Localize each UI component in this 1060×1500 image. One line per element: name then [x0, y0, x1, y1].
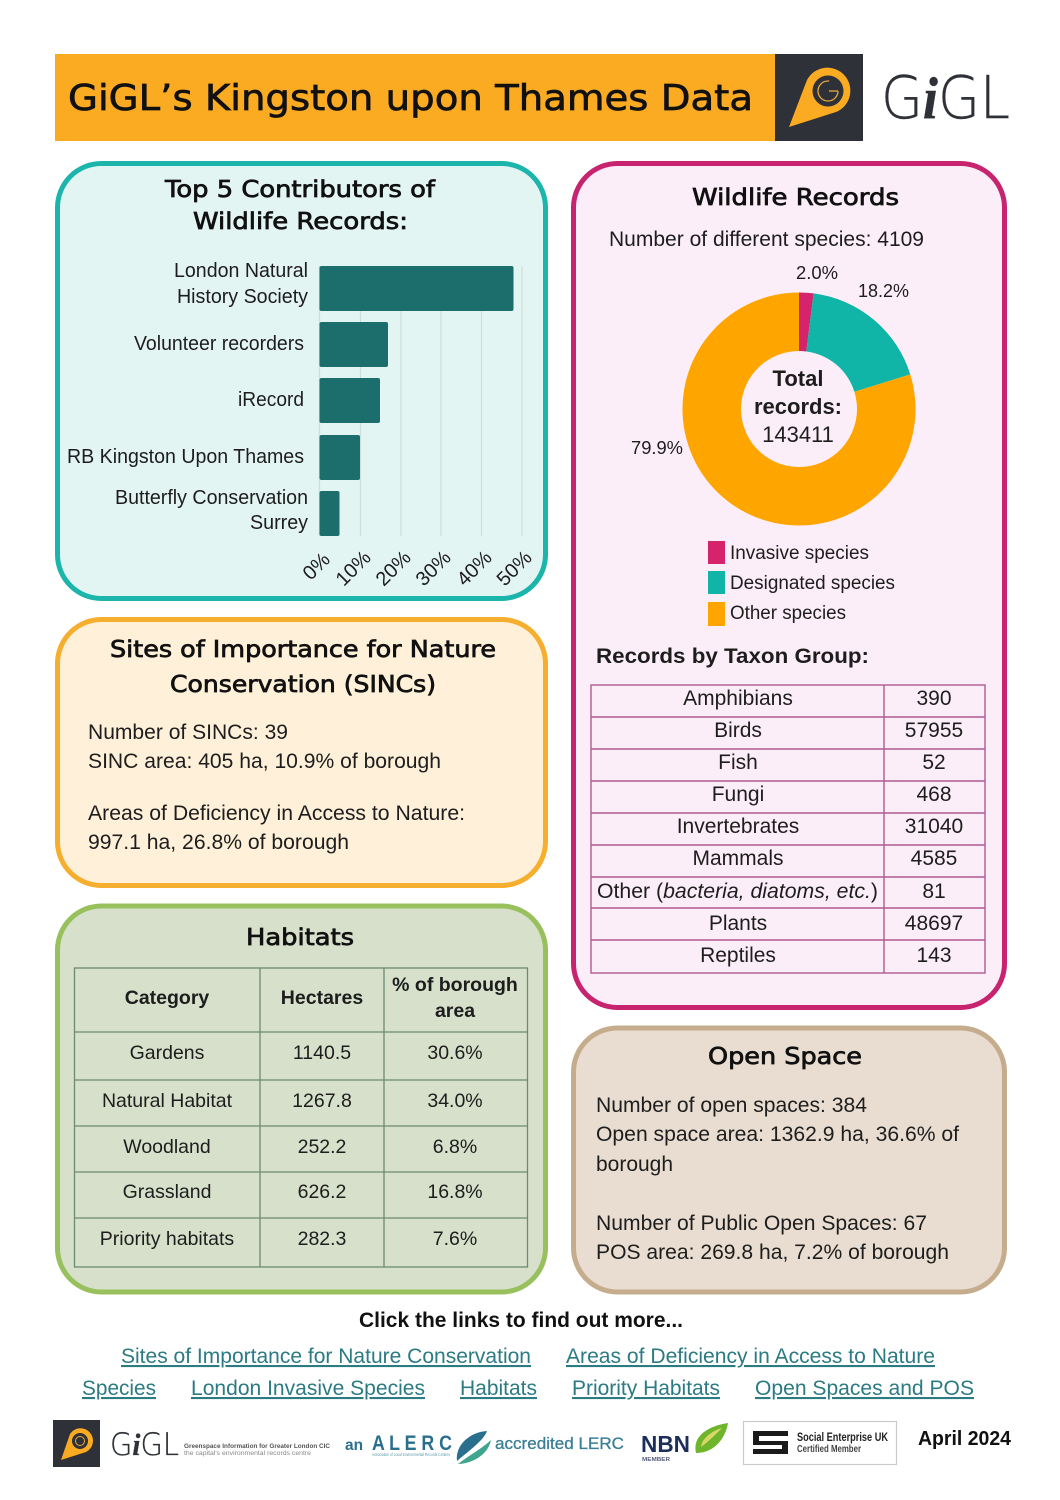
donut chart: records by species type: Total	[773, 366, 823, 391]
table: habitats: 30.6%	[427, 1042, 483, 1064]
table: habitats: Natural Habitat	[102, 1090, 233, 1112]
table: habitats: 34.0%	[427, 1090, 483, 1112]
table: habitats: Woodland	[123, 1136, 211, 1158]
heading: habitats: Habitats	[246, 925, 354, 951]
table: taxon groups: Fish	[718, 751, 758, 774]
text: open space figures: Open space area: 1362.9 ha, 36.6% of	[596, 1123, 959, 1146]
links: Sites of Importance for Nature Conservation	[121, 1345, 531, 1368]
footer logo: Social Enterprise UK: Certified Member	[797, 1444, 861, 1455]
heading: top 5 contributors: Top 5 Contributors of	[164, 177, 436, 203]
links: Open Spaces and POS	[755, 1377, 974, 1400]
table: habitats: 16.8%	[427, 1181, 483, 1203]
footer logo: ALERC accredited LERC: an	[345, 1437, 363, 1454]
table: taxon groups: 48697	[905, 912, 963, 935]
bar chart: contributors: 50%	[493, 547, 537, 591]
table: habitats: Grassland	[123, 1181, 211, 1203]
text: public open space figures: Number of Public Open Spaces: 67	[596, 1212, 927, 1235]
panel: open space	[574, 1028, 1004, 1292]
table: taxon groups: Other (bacteria, diatoms, etc.)	[597, 880, 878, 903]
table: habitats: 626.2	[298, 1181, 346, 1203]
table: habitats: % of borough	[392, 974, 518, 996]
text: public open space figures: POS area: 269.8 ha, 7.2% of borough	[596, 1241, 949, 1264]
icon: GiGL map pin	[775, 54, 863, 141]
table: taxon groups: 390	[916, 687, 952, 710]
donut chart: records by species type: 18.2%	[858, 281, 909, 301]
bar chart: contributors: History Society	[177, 286, 308, 308]
legend: species types: Designated species	[730, 573, 895, 594]
footer logo: GiGL: the capital's environmental records centre	[184, 1450, 311, 1457]
table: taxon groups: Invertebrates	[677, 815, 799, 838]
table: taxon groups: 4585	[911, 847, 957, 870]
bar chart: contributors: 20%	[372, 547, 416, 591]
heading: SINCs: Conservation (SINCs)	[170, 672, 436, 698]
table: taxon groups: Birds	[714, 719, 762, 742]
links	[82, 1345, 974, 1400]
bar chart: contributors: 30%	[412, 547, 456, 591]
links: Species	[82, 1377, 156, 1400]
text: deficiency figures: Areas of Deficiency in Access to Nature:	[88, 802, 465, 825]
table: taxon groups: 143	[916, 944, 952, 967]
table: taxon groups: Plants	[709, 912, 767, 935]
footer logo: NBN member: MEMBER	[642, 1457, 670, 1463]
text: deficiency figures: 997.1 ha, 26.8% of borough	[88, 831, 349, 854]
title: GiGL’s Kingston upon Thames Data	[68, 78, 753, 119]
footer logo: ALERC accredited LERC	[345, 1431, 624, 1464]
panel: habitats	[58, 906, 546, 1292]
text: SINC figures: SINC area: 405 ha, 10.9% of borough	[88, 750, 441, 773]
heading: wildlife records: Wildlife Records	[692, 185, 899, 211]
text: deficiency figures	[88, 802, 465, 854]
links: London Invasive Species	[191, 1377, 425, 1400]
footer logo: ALERC accredited LERC: A L E R C	[372, 1432, 452, 1455]
bar chart: contributors: 0%	[299, 549, 335, 585]
heading: SINCs: Sites of Importance for Nature	[110, 637, 496, 663]
text: public open space figures	[596, 1212, 949, 1264]
footer logo: ALERC accredited LERC: Association of Local Environmental Records Centres	[372, 1452, 451, 1457]
table: taxon groups: Amphibians	[683, 687, 793, 710]
bar chart: contributors	[67, 260, 537, 591]
heading: open space: Open Space	[708, 1044, 862, 1070]
footer logo: Social Enterprise UK: Social Enterprise UK	[797, 1432, 889, 1444]
table: habitats: area	[435, 1000, 475, 1022]
donut chart: records by species type	[631, 263, 916, 526]
heading: SINCs	[110, 637, 496, 698]
bar chart: contributors: 40%	[453, 547, 497, 591]
legend: species types: Invasive species	[730, 543, 869, 564]
footer logo: NBN member: NBN	[641, 1431, 690, 1457]
header banner	[55, 54, 775, 141]
footer logo: GiGL: GiGL	[110, 1427, 179, 1463]
logo: GiGL wordmark: GiGL	[881, 63, 1010, 132]
text: open space figures: Number of open spaces: 384	[596, 1094, 867, 1117]
callout: click the links: Click the links to find out more...	[359, 1309, 683, 1332]
table: taxon groups: Fungi	[712, 783, 764, 806]
footer logo: Social Enterprise UK	[744, 1422, 896, 1464]
table: habitats: Gardens	[130, 1042, 205, 1064]
table: taxon groups: 31040	[905, 815, 963, 838]
links: Priority Habitats	[572, 1377, 720, 1400]
legend: species types: Other species	[730, 603, 846, 624]
bar chart: contributors: London Natural	[174, 260, 308, 282]
table: taxon groups: 468	[916, 783, 952, 806]
footer logo: GiGL: Greenspace Information for Greater London CIC	[184, 1443, 330, 1450]
table: habitats: Priority habitats	[100, 1228, 234, 1250]
table: habitats	[74, 968, 528, 1267]
text: open space figures: borough	[596, 1153, 673, 1176]
links: Habitats	[460, 1377, 537, 1400]
table: taxon groups: Mammals	[692, 847, 784, 870]
heading: records by taxon group: Records by Taxon Group:	[596, 645, 869, 668]
bar chart: contributors: RB Kingston Upon Thames	[67, 446, 304, 468]
donut chart: records by species type: 143411	[762, 422, 834, 447]
donut chart: records by species type: records:	[754, 394, 842, 419]
footer logo: ALERC accredited LERC: accredited LERC	[495, 1435, 624, 1453]
table: taxon groups: 52	[922, 751, 946, 774]
panel: top 5 contributors	[58, 164, 546, 598]
bar chart: contributors: iRecord	[238, 389, 304, 411]
donut chart: records by species type: 79.9%	[631, 438, 683, 458]
text: species count: Number of different species: 4109	[609, 228, 924, 251]
bar chart: contributors: Volunteer recorders	[134, 333, 304, 355]
text: SINC figures: Number of SINCs: 39	[88, 721, 288, 744]
table: habitats: 6.8%	[433, 1136, 477, 1158]
heading: top 5 contributors: Wildlife Records:	[193, 209, 408, 235]
panel: SINCs	[58, 620, 546, 886]
table: habitats: 1140.5	[293, 1042, 351, 1064]
table: habitats: 282.3	[298, 1228, 346, 1250]
table: habitats: Hectares	[281, 987, 363, 1009]
links: Areas of Deficiency in Access to Nature	[566, 1345, 935, 1368]
table: taxon groups: 81	[922, 880, 946, 903]
table: taxon groups	[591, 685, 985, 973]
table: habitats: 1267.8	[292, 1090, 352, 1112]
table: taxon groups: 57955	[905, 719, 963, 742]
table: habitats: 252.2	[298, 1136, 346, 1158]
footer logo: NBN member	[641, 1423, 728, 1463]
heading: top 5 contributors	[164, 177, 436, 235]
date: April 2024	[918, 1428, 1012, 1450]
table: habitats: 7.6%	[433, 1228, 477, 1250]
legend: species types	[708, 541, 895, 626]
table: habitats: Category	[125, 987, 209, 1009]
panel: wildlife records	[574, 164, 1004, 1008]
donut chart: records by species type: 2.0%	[796, 263, 838, 283]
bar chart: contributors: Butterfly Conservation	[115, 487, 308, 509]
text: open space figures	[596, 1094, 959, 1176]
text: SINC figures	[88, 721, 441, 773]
footer logo: GiGL	[53, 1420, 330, 1467]
bar chart: contributors: Surrey	[250, 512, 308, 534]
bar chart: contributors: 10%	[332, 547, 376, 591]
table: taxon groups: Reptiles	[700, 944, 776, 967]
